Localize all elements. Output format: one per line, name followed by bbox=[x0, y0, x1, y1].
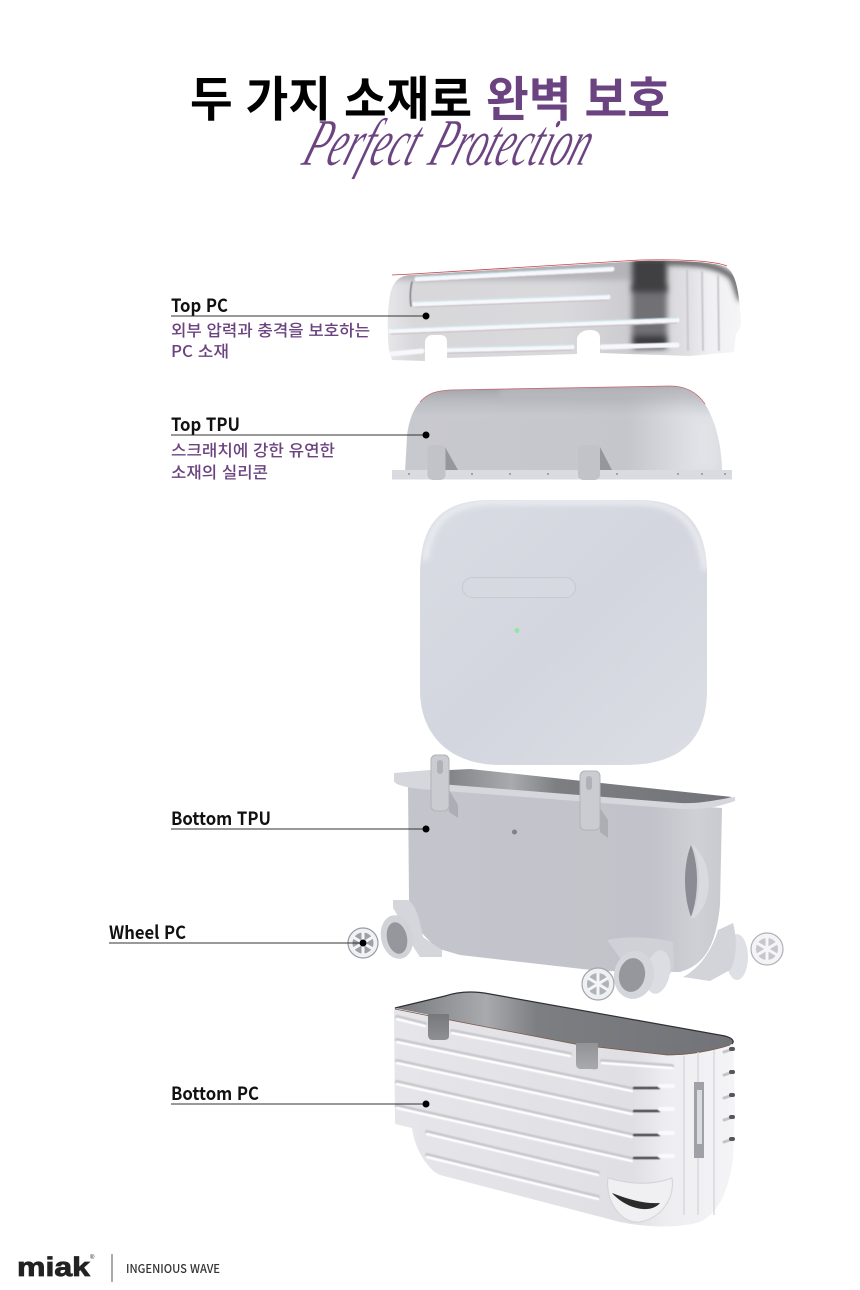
callout: Top TPU: 스크래치에 강한 유연한 bbox=[171, 437, 335, 461]
top TPU clips bbox=[428, 445, 612, 480]
callout: Top TPU: 소재의 실리콘 bbox=[171, 459, 268, 483]
top TPU flange bbox=[392, 470, 732, 480]
brand footer: ® bbox=[90, 1254, 95, 1261]
callout: Top PC: PC 소재 bbox=[171, 338, 229, 362]
callout: Top PC: Top PC bbox=[171, 292, 228, 318]
callout: Bottom TPU bbox=[171, 805, 430, 832]
wheel PC: front bbox=[582, 968, 614, 1000]
subtitle script: Protection bbox=[420, 105, 606, 180]
clips bbox=[431, 755, 608, 838]
callout: Top TPU: Top TPU bbox=[171, 411, 240, 437]
title: 완벽 보호 bbox=[486, 60, 670, 130]
bottom PC opening bbox=[395, 992, 733, 1055]
callout: Bottom PC bbox=[171, 1080, 430, 1108]
top PC ribs bbox=[391, 267, 719, 354]
callout: Top PC: 외부 압력과 충격을 보호하는 bbox=[171, 317, 370, 341]
inner opening bbox=[430, 769, 732, 808]
callout: Top PC bbox=[171, 292, 430, 362]
bottom PC tabs bbox=[428, 1014, 598, 1069]
wheel housing: left bbox=[377, 900, 442, 962]
side handle bbox=[685, 844, 709, 918]
bottom PC handle recess bbox=[608, 1178, 672, 1222]
subtitle script bbox=[294, 105, 606, 180]
rim bbox=[394, 770, 735, 809]
hole bbox=[512, 830, 517, 834]
wheel PC: left bbox=[348, 928, 378, 958]
part: bottom PC shell bbox=[394, 992, 735, 1226]
part: earbud charging case bbox=[420, 500, 707, 765]
callout: Wheel PC bbox=[109, 919, 366, 946]
part: bottom TPU shell bbox=[377, 755, 748, 1002]
brand footer: INGENIOUS WAVE bbox=[126, 1260, 220, 1277]
callout: Wheel PC: Wheel PC bbox=[109, 919, 186, 945]
LED bbox=[514, 628, 520, 633]
top PC notches bbox=[425, 330, 600, 365]
title bbox=[190, 60, 670, 130]
bottom PC ribs bbox=[397, 1017, 673, 1199]
bottom PC body bbox=[394, 1008, 735, 1226]
bottom PC side bbox=[684, 1049, 733, 1215]
subtitle script: Perfect bbox=[294, 105, 435, 180]
brand footer bbox=[17, 1252, 220, 1282]
wheel housing: right bbox=[683, 923, 748, 981]
brand footer: miak bbox=[17, 1252, 91, 1282]
part: top TPU shell bbox=[392, 384, 732, 480]
part: top PC shell bbox=[385, 258, 745, 365]
callout: Bottom PC: Bottom PC bbox=[171, 1080, 259, 1106]
title: 두 가지 소재로 bbox=[190, 60, 472, 130]
callout: Top TPU bbox=[171, 411, 430, 483]
wheel housing: front bbox=[607, 937, 674, 1002]
callout: Bottom TPU: Bottom TPU bbox=[171, 805, 271, 831]
body bbox=[408, 785, 722, 972]
wheel PC: right bbox=[751, 933, 783, 965]
